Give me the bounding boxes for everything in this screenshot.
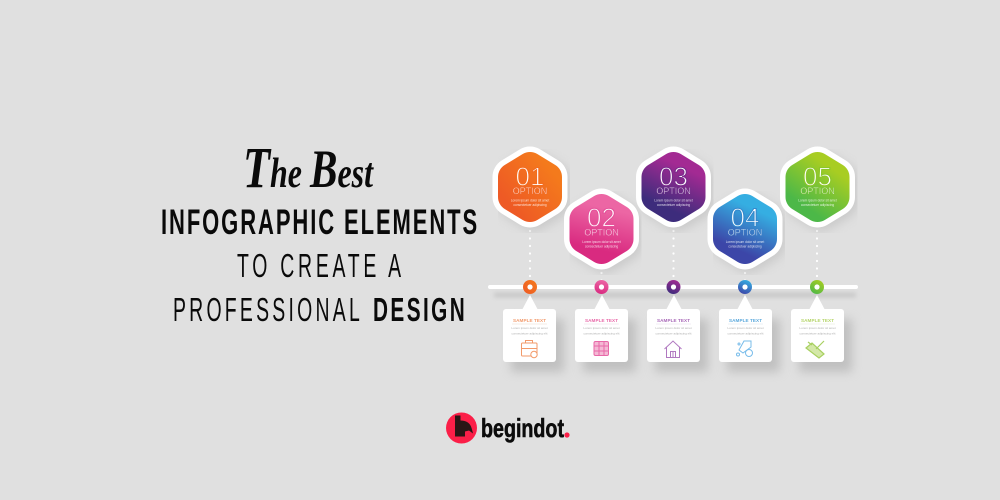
card 03: consectetuer adipiscing elit: [655, 332, 692, 336]
hexagon 02: Lorem ipsum dolor sit amet: [582, 240, 621, 244]
icon: cleaning tools: [736, 341, 752, 356]
dotted connectors: [530, 231, 817, 281]
card 04: [719, 295, 780, 372]
logo: begindot: [446, 412, 570, 444]
card 01: Lorem ipsum dolor sit amet: [511, 326, 548, 330]
hexagon 01: [511, 162, 552, 212]
hexagon 01: OPTION: [513, 186, 547, 196]
hexagon 01: Lorem ipsum dolor sit amet: [511, 198, 549, 202]
hexagon 02: consectetuer adipiscing: [585, 244, 618, 248]
card 02: consectetuer adipiscing elit: [583, 332, 620, 336]
hexagon 04: 04: [731, 202, 759, 232]
card 05: SAMPLE TEXT: [801, 318, 834, 323]
card 01: [503, 295, 564, 372]
icon: patterned square: [594, 342, 608, 356]
hexagon 04: Lorem ipsum dolor sit amet: [726, 240, 764, 244]
timeline markers: [523, 280, 824, 294]
card 04: SAMPLE TEXT: [729, 318, 762, 323]
hexagon 01: 01: [516, 162, 544, 192]
hexagon 03: Lorem ipsum dolor sit amet: [654, 198, 693, 202]
card 02: SAMPLE TEXT: [585, 318, 618, 323]
hexagon 03: consectetuer adipiscing: [657, 203, 690, 207]
card 02: Lorem ipsum dolor sit amet: [583, 326, 620, 330]
card 05: consectetuer adipiscing elit: [799, 332, 836, 336]
timeline line: [488, 285, 858, 297]
hexagon 04: OPTION: [728, 228, 762, 238]
hexagon 02: 02: [587, 202, 616, 232]
hexagon 02: [582, 202, 624, 254]
hexagon 05: [798, 162, 840, 212]
card 01: SAMPLE TEXT: [513, 318, 546, 323]
hexagon 02: OPTION: [584, 228, 619, 238]
card 03: [647, 295, 708, 372]
icon: brushes: [806, 341, 824, 358]
card 04: consectetuer adipiscing elit: [727, 332, 764, 336]
title block: [161, 135, 477, 328]
heading line: to create a: TO CREATE A: [237, 246, 402, 284]
heading word: design: DESIGN: [373, 291, 465, 328]
heading line: infographic elements: INFOGRAPHIC ELEMENTS: [161, 203, 477, 242]
hexagon 01: consectetuer adipiscing: [513, 203, 547, 207]
logo: begindot: begindot: [481, 413, 564, 443]
card 03: Lorem ipsum dolor sit amet: [655, 326, 692, 330]
hexagon 05: Lorem ipsum dolor sit amet: [798, 198, 837, 202]
hexagon 03: [654, 162, 696, 212]
hexagon 03: 03: [659, 162, 688, 192]
card 04: Lorem ipsum dolor sit amet: [727, 326, 764, 330]
card 03: SAMPLE TEXT: [657, 318, 690, 323]
icon: house: [664, 341, 682, 358]
heading line: professional: PROFESSIONAL: [173, 290, 360, 328]
hexagon 03: OPTION: [656, 186, 691, 196]
hexagon 05: 05: [803, 162, 832, 192]
card 02: [575, 295, 636, 372]
card 05: Lorem ipsum dolor sit amet: [799, 326, 836, 330]
hexagon 04: consectetuer adipiscing: [728, 244, 762, 248]
script heading: The Best: The Best: [243, 135, 374, 200]
hexagon 04: [726, 202, 767, 254]
icon: briefcase with clock: [522, 340, 537, 358]
hexagon 05: consectetuer adipiscing: [801, 203, 834, 207]
hexagon 05: OPTION: [800, 186, 835, 196]
card 05: [791, 295, 852, 372]
card 01: consectetuer adipiscing elit: [511, 332, 548, 336]
